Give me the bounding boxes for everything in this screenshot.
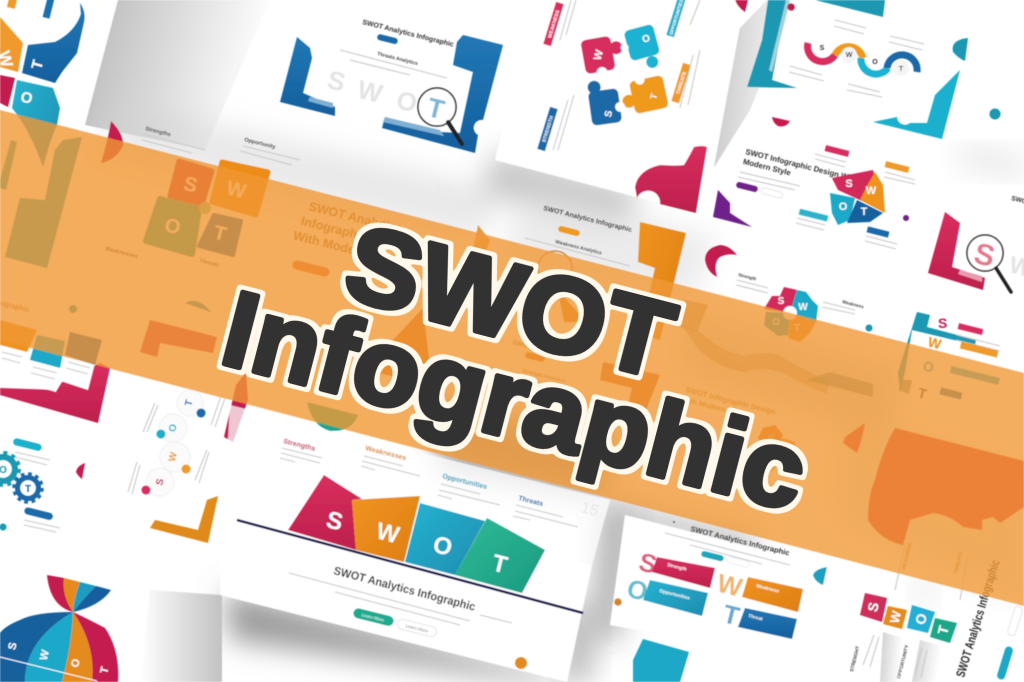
panel: center slide weakness analytics <box>365 205 686 410</box>
panel: SWOT tiles slide: Threats <box>199 258 220 269</box>
orange bracket <box>638 222 686 340</box>
square T <box>930 618 957 643</box>
letter S: S <box>636 546 660 580</box>
wave: W segment <box>835 47 863 58</box>
wave: O segment <box>861 58 888 74</box>
puzzle piece T <box>618 70 669 116</box>
olive wave <box>682 325 830 394</box>
hidden headline: SWOT Infographic Design <box>685 385 777 416</box>
flower teal quarter <box>790 290 818 322</box>
title: SWOT: SWOT <box>334 201 686 401</box>
card white middle <box>22 360 63 392</box>
orange bracket lower <box>600 362 660 410</box>
puzzle piece W: W <box>592 48 606 62</box>
panel: puzzle slide top-left corner <box>0 0 85 268</box>
tag weakness <box>742 577 803 612</box>
card white left <box>0 345 27 378</box>
puzzle piece S <box>586 77 627 126</box>
tile letters: O <box>162 214 183 239</box>
tag: threats <box>671 63 691 103</box>
center flower puzzle <box>830 170 885 225</box>
tag crimson <box>958 323 983 335</box>
subtitle under band: Strength Analytics <box>522 368 566 385</box>
tag orange <box>960 342 998 358</box>
small left bracket peak <box>465 225 490 290</box>
slide title: SWOT Analytics Infographic <box>362 19 454 49</box>
tag orange <box>885 161 909 173</box>
crimson strip <box>224 372 248 442</box>
tag opportunities: Opportunities <box>659 588 691 602</box>
panel: SWOT analytics tag slide <box>607 515 840 682</box>
lower teal <box>25 612 73 682</box>
node letters: O <box>167 423 180 433</box>
navy baseline <box>237 520 583 613</box>
block letters: W <box>373 518 402 549</box>
slide title: SWOT Infographic Design With <box>745 147 859 184</box>
purple corner <box>713 190 752 227</box>
node dots <box>142 408 206 494</box>
ghost letters <box>324 64 420 118</box>
dark point <box>673 521 675 523</box>
node letters: S <box>154 477 167 487</box>
flower hub and letters <box>772 296 808 334</box>
letter T: T <box>720 598 743 631</box>
icon: magnifier over T <box>418 88 462 144</box>
crimson corner top <box>735 0 748 12</box>
panel: puzzle slide <box>537 0 748 213</box>
panel: puzzle slide top-left corner: T <box>28 58 47 71</box>
outline button <box>761 187 783 199</box>
purple button <box>736 181 758 193</box>
hidden headline: With Modern Style <box>680 394 746 419</box>
labels: STRENGHT <box>849 645 861 672</box>
subtitle: Weakness Analytics <box>555 239 603 257</box>
panel: vertical SWOT slide bottom right: THREATS <box>953 551 965 574</box>
butterfly W segment <box>0 17 23 72</box>
crimson bracket <box>928 212 985 290</box>
butterfly T segment <box>22 3 84 83</box>
node letters <box>154 399 196 487</box>
panel: right slide under band <box>678 300 1024 600</box>
left bracket <box>280 37 335 116</box>
fish letters <box>6 641 112 675</box>
tag blue <box>939 387 962 400</box>
node letters: T <box>183 399 196 407</box>
block letters: O <box>430 531 455 562</box>
ghost letters: S <box>324 64 348 98</box>
teal shape bottom <box>633 639 689 682</box>
tag teal <box>950 366 1000 385</box>
block T <box>455 518 545 593</box>
labels: strengths and opportunity: Strengths <box>145 126 171 138</box>
puzzle piece T: T <box>648 92 660 100</box>
butterfly S segment <box>0 75 15 107</box>
slide text under band: SWOT Analytics <box>512 339 562 358</box>
hex flower <box>744 425 796 498</box>
pill <box>558 225 580 237</box>
ghost circles <box>146 390 203 496</box>
orange dot <box>515 657 527 669</box>
fish letters: S <box>6 641 20 651</box>
flower hub and letters: W <box>798 302 808 313</box>
letter O: O <box>624 573 651 607</box>
center flower puzzle: O <box>839 201 848 213</box>
square O <box>907 605 935 633</box>
fish letters: O <box>69 657 83 669</box>
panel: puzzle slide top-left corner: O <box>19 89 35 108</box>
pill <box>377 34 398 45</box>
center flower puzzle: S <box>845 178 853 190</box>
upper fan teal <box>73 582 96 612</box>
fish letters: W <box>38 648 52 662</box>
teal dot <box>69 305 77 313</box>
tile W <box>212 162 268 215</box>
puzzle piece W <box>580 34 627 81</box>
button <box>291 260 330 277</box>
upper fan blue <box>73 586 111 612</box>
panel: modern style slide <box>713 117 915 249</box>
slide number 13: 13 <box>431 178 454 201</box>
ghost letters: O <box>393 84 420 118</box>
tag chips <box>7 0 17 9</box>
tag opportunities <box>643 580 708 616</box>
button outline: Learn More <box>405 623 429 634</box>
bracket highlights <box>383 117 444 136</box>
wave: S segment <box>808 43 835 62</box>
block letters: S <box>324 506 346 536</box>
teal half circle <box>813 567 827 585</box>
panel: vertical SWOT slide bottom right <box>849 541 1023 680</box>
crimson dot <box>787 3 795 11</box>
flower hub and letters: T <box>794 323 800 334</box>
orange translucent banner <box>0 110 1024 606</box>
tag teal <box>12 438 42 452</box>
column: weaknesses <box>361 445 420 476</box>
slide card <box>610 515 840 660</box>
text lines <box>738 172 800 190</box>
wave circles and letters: O <box>872 59 878 66</box>
tag crimson <box>825 145 849 157</box>
wave circles and letters: T <box>899 66 904 73</box>
half-circle accent <box>101 121 123 163</box>
crimson half circle <box>772 117 790 126</box>
teal dot <box>0 524 6 530</box>
magnifier under band <box>538 251 586 322</box>
panel: wave timeline slide <box>747 0 1000 139</box>
flower orange quarter <box>788 313 816 342</box>
panel: slide with headline under band <box>291 178 454 277</box>
headline: With Modern Style <box>292 228 401 268</box>
panel: vertical SWOT slide bottom right: WEAKNESS <box>901 541 914 570</box>
lower orange <box>62 612 93 682</box>
crimson L <box>140 320 217 357</box>
slide title: SWOT Analytics Infographic <box>332 565 477 614</box>
orange dot <box>614 598 622 606</box>
upper fan crimson <box>47 575 73 612</box>
column: strengths: Strengths <box>283 438 316 453</box>
letter O: O <box>921 358 936 376</box>
teal top bar <box>815 0 885 17</box>
column: threats: Threats <box>518 495 544 508</box>
tag threat: Threat <box>748 613 764 623</box>
icon: magnifier over S: S <box>971 237 998 274</box>
tile letters: W <box>224 177 248 203</box>
slide number 15: 15 <box>579 499 601 520</box>
crimson base <box>0 363 110 423</box>
puzzle piece S: S <box>603 109 615 118</box>
teal bracket shape <box>5 137 82 268</box>
tile letters: S <box>181 173 200 197</box>
column: opportunities: Opportunities <box>442 473 488 491</box>
bracket <box>898 312 976 393</box>
blue corner bracket <box>873 70 960 139</box>
wave: T segment <box>887 55 917 72</box>
body text lines <box>289 573 512 625</box>
outline pill <box>727 556 749 568</box>
flower olive quarter <box>764 312 790 336</box>
main slide lower card <box>220 470 592 682</box>
teal bracket <box>747 0 797 88</box>
tag: strength <box>537 107 558 151</box>
crimson corner blob <box>635 146 707 213</box>
wave circles and letters: S <box>820 45 825 52</box>
tile T <box>199 215 241 255</box>
square S <box>860 593 887 622</box>
teal half circle <box>953 38 968 61</box>
center flower puzzle: T <box>861 206 868 218</box>
block O <box>405 503 485 575</box>
right bracket <box>382 35 503 153</box>
flower crimson quarter <box>764 287 797 313</box>
tag: weakness: WEAKNESS <box>547 9 562 39</box>
vertical pill <box>996 646 1014 680</box>
tile letters: T <box>211 222 228 246</box>
panel: vertical SWOT slide bottom right: OPPORTUNITY <box>896 644 911 679</box>
square O: O <box>912 612 930 626</box>
block letters <box>324 506 510 579</box>
labels: weaknesses and threats: Weaknesses <box>105 246 138 260</box>
header blue <box>65 332 102 365</box>
letter T: T <box>916 385 929 402</box>
vertical tag <box>0 140 17 190</box>
letter W: W <box>714 568 746 603</box>
hex flower: S <box>768 434 775 445</box>
header orange <box>0 320 37 352</box>
icon: magnifier over T: T <box>424 92 448 125</box>
lower crimson <box>73 612 118 682</box>
headline: Infographic Design <box>300 214 413 255</box>
center dot <box>199 202 211 214</box>
puzzle piece O <box>617 24 663 75</box>
crimson half circle <box>76 463 85 479</box>
panel: magnifier S slide <box>928 195 1024 292</box>
butterfly O segment <box>12 80 60 167</box>
panel: SWOT tiles slide: Opportunity <box>244 137 277 151</box>
ghost letters: W <box>354 74 386 109</box>
center flower puzzle: W <box>866 185 877 197</box>
panel: circles timeline slide <box>128 390 225 543</box>
slide card upper <box>226 405 610 565</box>
block W <box>352 496 420 562</box>
vertical outline pill <box>1007 605 1023 637</box>
tag weakness: Weakness <box>756 583 780 595</box>
ghost icons <box>895 545 968 600</box>
tag blue <box>24 507 54 521</box>
crimson accent <box>705 245 737 277</box>
teal dot <box>866 324 872 332</box>
upper fan orange <box>64 578 80 612</box>
title: Infographic: Infographic <box>211 267 819 533</box>
tag strength <box>652 557 715 588</box>
button learn more <box>352 607 395 627</box>
olive block <box>678 300 708 332</box>
label strength: Strength <box>738 272 757 282</box>
tag: strength: STRENGTH <box>541 115 555 143</box>
tile S <box>170 161 212 204</box>
panel: bottom-left fish diagram <box>0 575 118 682</box>
vertical title: SWOT Analytics Infographic <box>953 558 1003 679</box>
crimson half accent <box>843 423 865 453</box>
tag blue <box>867 226 889 238</box>
square W: W <box>887 609 904 625</box>
fish divider <box>0 657 97 681</box>
olive strip <box>899 380 912 394</box>
column: strengths <box>280 438 322 463</box>
panel: main SWOT slide <box>226 402 610 669</box>
label weakness: Weakness <box>842 299 865 309</box>
tag threat <box>738 608 797 639</box>
puzzle piece O: O <box>641 33 652 46</box>
big crimson blob under band <box>868 428 1024 545</box>
block letters: T <box>489 550 510 579</box>
button under band <box>525 352 545 362</box>
panel: gears slide <box>0 438 85 532</box>
tile O <box>146 199 199 254</box>
letter S: S <box>938 315 947 331</box>
teal half circle <box>307 402 358 431</box>
tag: weakness <box>543 2 564 46</box>
wave circles and letters <box>820 45 909 76</box>
column: threats <box>513 495 578 527</box>
button learn more: Learn More <box>361 612 385 623</box>
square W <box>883 606 907 629</box>
teal pill <box>701 550 724 562</box>
text under band: ographic <box>0 300 30 314</box>
tag: threats: THREATS <box>675 71 688 95</box>
slide title: SWOT Analytics Infographic <box>543 205 633 234</box>
panel: left slide cards <box>0 300 248 442</box>
slide title: SWOT Analytics Infographic <box>690 524 790 558</box>
headline: SWOT Analytics <box>307 199 404 236</box>
orange bracket <box>150 496 218 543</box>
wave circles and letters: W <box>846 52 853 59</box>
flower hub and letters: O <box>772 317 780 328</box>
flower hub and letters: S <box>778 296 785 307</box>
node letters: W <box>167 451 180 463</box>
purple dot <box>903 215 909 221</box>
panel: list slide right <box>898 312 1000 402</box>
column: weaknesses: Weaknesses <box>365 445 407 462</box>
column: opportunities <box>438 473 500 505</box>
panel: threats analytics slide <box>280 19 503 153</box>
block S <box>288 475 362 550</box>
square T: T <box>934 623 952 636</box>
orange triangle left <box>365 308 432 385</box>
panel: SWOT tiles slide <box>101 121 300 269</box>
button outline <box>396 618 438 638</box>
card white right <box>58 355 95 390</box>
subtitle: Threats Analytics <box>377 51 418 67</box>
icon: gear T: T <box>25 484 31 495</box>
slide title: Modern Style <box>742 157 792 178</box>
header teal <box>30 335 65 368</box>
ghost number: F <box>607 645 617 662</box>
square S: S <box>864 601 882 613</box>
tag teal <box>799 209 828 222</box>
tile letters <box>162 173 248 246</box>
letter W: W <box>926 334 944 352</box>
half circle <box>185 301 211 312</box>
panel: gear flower slide <box>705 245 872 342</box>
lower blue <box>0 612 73 682</box>
tag strength: Strength <box>667 562 687 573</box>
olive bar <box>807 372 873 397</box>
puzzle slide card <box>495 0 745 215</box>
teal dot <box>990 108 1000 120</box>
fish letters: T <box>98 665 112 675</box>
